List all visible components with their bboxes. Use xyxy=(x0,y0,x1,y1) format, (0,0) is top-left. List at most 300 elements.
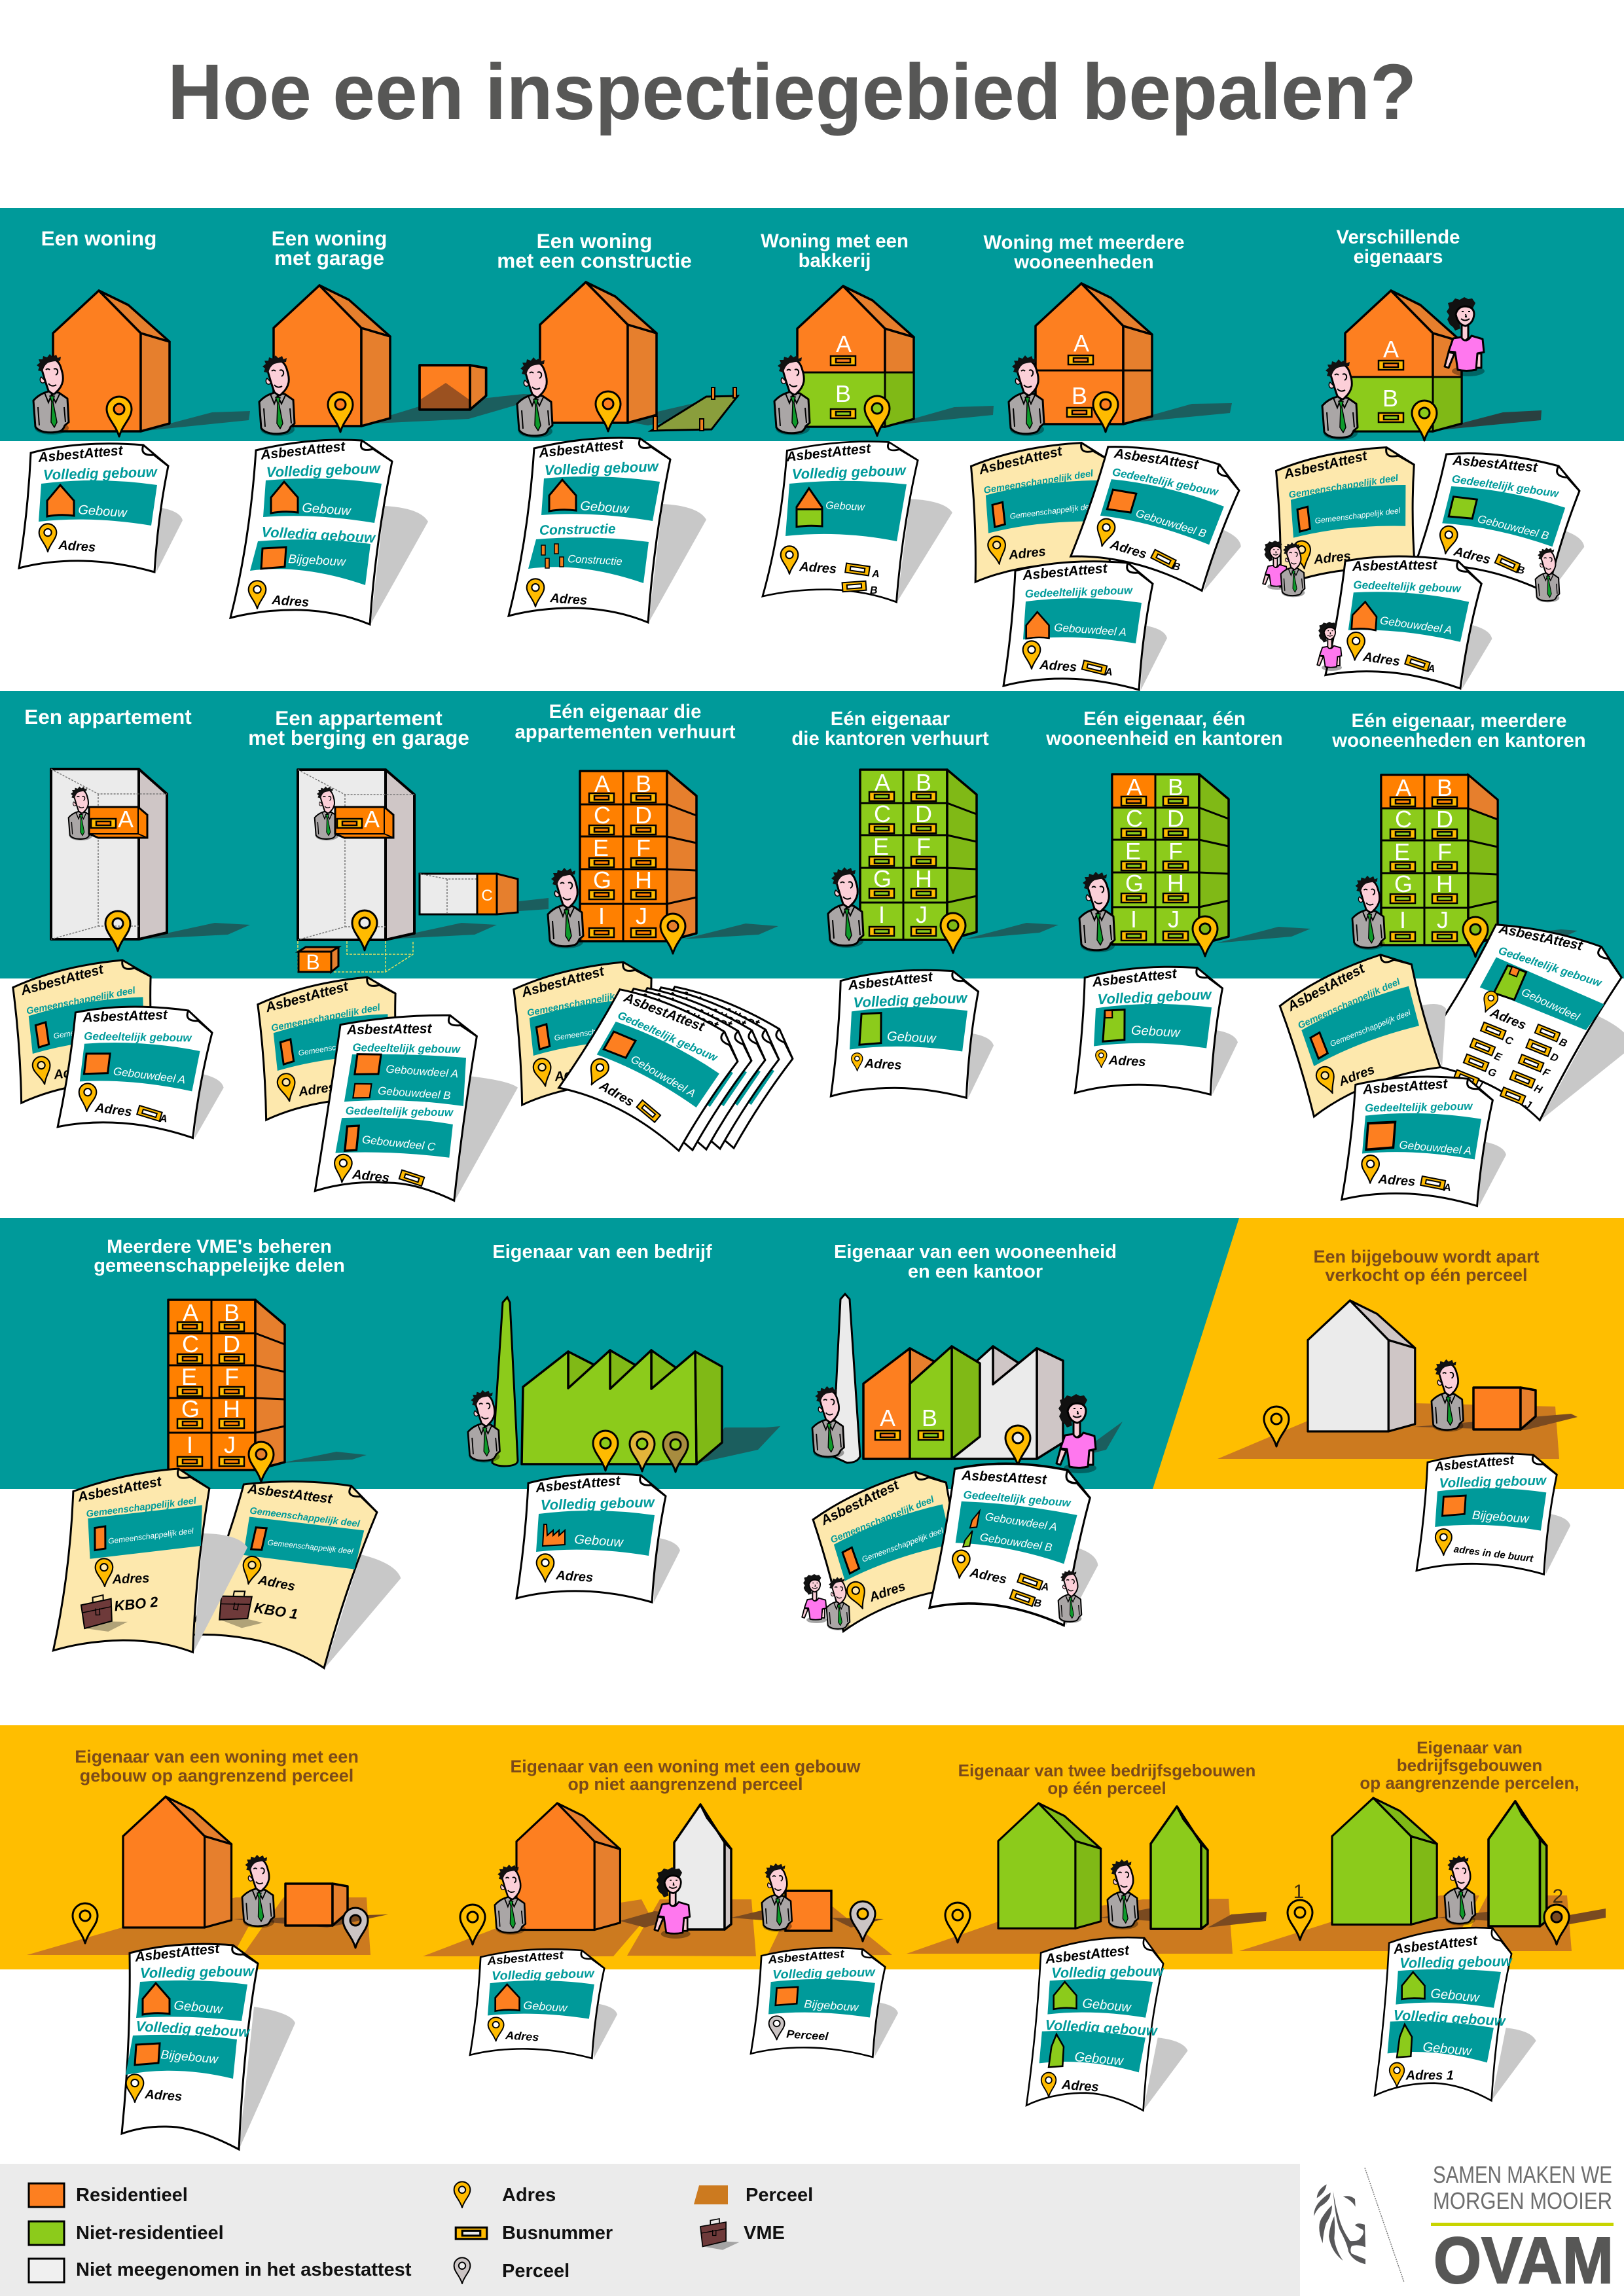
attest: part A: Adres xyxy=(1377,1172,1416,1189)
attest: part A: Gedeeltelijk gebouw xyxy=(84,1030,193,1045)
address pin xyxy=(107,397,132,437)
tower: B xyxy=(1168,774,1183,800)
heading: Een appartement xyxy=(24,705,192,728)
legend item: Residentieel: Residentieel xyxy=(76,2185,188,2206)
house two-tone xyxy=(1345,291,1462,431)
legend item: Perceel xyxy=(694,2185,813,2206)
panel: Woning met een bakkerij xyxy=(761,230,994,602)
garage C: C xyxy=(481,887,493,905)
attest: parts A and B: Gebouwdeel B xyxy=(979,1531,1053,1554)
attest xyxy=(1375,1928,1536,2101)
attest: Gebouw xyxy=(574,1532,624,1550)
heading: Eigenaar van twee bedrijfsgebouwen xyxy=(958,1762,1255,1780)
attest: KBO 1: KBO 1 xyxy=(253,1600,299,1623)
heading: Eén eigenaar die xyxy=(549,701,701,723)
man xyxy=(517,357,552,438)
heading: Woning met een xyxy=(761,230,909,252)
tower: H xyxy=(915,865,932,892)
attest: AsbestAttest xyxy=(534,1473,621,1496)
attest: Adres xyxy=(58,538,96,555)
attest: KBO 2: Gemeenschappelijk deel xyxy=(86,1496,198,1520)
attest: Bijgebouw: Bijgebouw xyxy=(804,1998,859,2014)
attest: part A: Gebouwdeel A xyxy=(1379,614,1453,637)
attest: part A: A xyxy=(159,1113,168,1124)
building shadow xyxy=(629,397,740,425)
tower xyxy=(1381,774,1498,945)
attest: common part: Adres xyxy=(297,1080,336,1100)
shadow xyxy=(1414,1414,1578,1430)
attest xyxy=(19,443,183,572)
house xyxy=(123,1797,232,1928)
attest: part B: AsbestAttest xyxy=(1452,453,1539,475)
panel: Een appartement met berging en garage xyxy=(244,706,549,1204)
attest: Gebouw xyxy=(1130,1023,1182,1040)
attest: AsbestAttest xyxy=(537,437,624,461)
address pin xyxy=(352,910,377,950)
units A and B: A xyxy=(1074,330,1089,357)
attest: Bijgebouw: Volledig gebouw xyxy=(772,1966,876,1982)
man xyxy=(468,1390,500,1463)
panel: Eigenaar van een woning met een gebouw op niet aangrenzend perceel xyxy=(423,1757,898,2058)
man xyxy=(1445,1856,1475,1926)
attest: common part: Adres xyxy=(1336,1062,1377,1089)
tower: E xyxy=(1394,838,1410,865)
panel: Woning met meerdere wooneenheden xyxy=(958,232,1258,690)
pin 2: 2 xyxy=(1553,1886,1563,1907)
panel: Eigenaar van een wooneenheid en een kantoor xyxy=(799,1242,1123,1635)
units A and B: B xyxy=(1072,382,1087,409)
attest: Volledig gebouw xyxy=(43,463,158,483)
attest: Bijgebouw xyxy=(751,1946,898,2057)
legend item: Busnummer: Busnummer xyxy=(502,2223,613,2244)
man xyxy=(33,354,69,435)
building shadow xyxy=(890,406,994,425)
attest: common part: Gemeenschappelijk deel xyxy=(26,985,137,1017)
attest: A xyxy=(871,569,880,580)
attest: part B xyxy=(1414,442,1598,598)
chimney xyxy=(492,1297,518,1466)
panel: Eén eigenaar die appartementen verhuurt xyxy=(500,701,803,1157)
legend item: Niet-residentieel: Niet-residentieel xyxy=(76,2223,224,2244)
attest: list of units: Adres xyxy=(1488,1005,1528,1033)
woman xyxy=(655,1867,691,1939)
building shadow xyxy=(964,923,1058,939)
plot pin xyxy=(850,1901,875,1941)
man xyxy=(774,355,810,435)
building shadow xyxy=(1433,410,1542,431)
attest: part A: Gedeeltelijk gebouw xyxy=(1024,584,1134,600)
attest: AsbestAttest xyxy=(37,443,124,465)
man xyxy=(315,787,338,840)
attest: KBO 1 xyxy=(187,1461,416,1679)
annex xyxy=(1473,1388,1536,1429)
garage C xyxy=(420,874,518,914)
house xyxy=(1036,283,1152,424)
attest: common part: Adres xyxy=(1007,545,1047,563)
plot xyxy=(907,1899,1233,1954)
attest: common part: Gemeenschappelijk deel xyxy=(53,1018,139,1041)
heading: met berging en garage xyxy=(248,726,469,749)
heading: Een woning xyxy=(537,229,652,253)
attest: common part xyxy=(1265,937,1466,1121)
tower: I xyxy=(1130,906,1137,933)
tower: J xyxy=(1168,906,1180,933)
attest: list of units xyxy=(1411,897,1624,1142)
attest fan: back sheets: AsbestAttest xyxy=(649,988,734,1033)
owner right xyxy=(1536,548,1559,602)
attest: parts A and B xyxy=(929,1456,1107,1628)
storage B xyxy=(298,947,338,974)
attest: common part: Gemeenschappelijk deel xyxy=(526,987,638,1019)
tower: G xyxy=(593,867,611,893)
tower: A xyxy=(1127,774,1142,800)
panel: Een bijgebouw wordt apart verkocht op één perceel xyxy=(1218,1247,1578,1574)
attest: Gebouw xyxy=(887,1029,937,1046)
attest: part A: AsbestAttest xyxy=(1352,558,1438,574)
attest: common part: Adres xyxy=(553,1065,592,1085)
attest: Gebouw: AsbestAttest xyxy=(486,1948,564,1967)
attest: common part: Adres xyxy=(52,1063,92,1083)
attest: parts A B C xyxy=(315,1007,522,1204)
units A and B: A xyxy=(880,1405,895,1431)
attest: part A: A xyxy=(1104,667,1113,678)
tower: J xyxy=(636,903,647,929)
attest fan: front sheet: AsbestAttest xyxy=(621,990,707,1035)
tower: C xyxy=(874,800,891,827)
attest: Volledig gebouw xyxy=(1399,1953,1513,1971)
attest: AsbestAttest xyxy=(134,1941,221,1965)
legend background xyxy=(0,2164,1300,2296)
attest: common part: Adres xyxy=(1312,549,1352,567)
tower: E xyxy=(181,1363,197,1390)
attest: list of units: F xyxy=(1541,1067,1552,1080)
attest: part A: Adres xyxy=(1362,649,1401,669)
annex xyxy=(785,1891,831,1931)
attest: parts A B C: Gebouwdeel C xyxy=(361,1133,437,1153)
man xyxy=(812,1386,844,1459)
attest: part B: Adres xyxy=(1452,544,1492,567)
address pin xyxy=(105,911,130,951)
attest xyxy=(509,437,706,622)
attest: list of units: D xyxy=(1549,1051,1560,1065)
attest xyxy=(516,1473,680,1602)
attest: Volledig gebouw xyxy=(1393,2007,1507,2029)
attest: Adres xyxy=(1060,2077,1099,2095)
band: row 2 teal xyxy=(0,691,1624,978)
attest: common part: AsbestAttest xyxy=(977,444,1064,478)
panel: Een appartement xyxy=(0,705,250,1139)
attest: part B: B xyxy=(1516,564,1525,577)
logo wordmark: OVAM xyxy=(1434,2224,1614,2296)
attest: part B xyxy=(1070,435,1258,597)
attest: common part: Gemeenschappelijk deel xyxy=(554,1020,640,1043)
attest: Adres xyxy=(144,2087,183,2104)
tower: C xyxy=(1395,806,1412,833)
tower xyxy=(860,769,977,940)
address pin xyxy=(1463,917,1488,957)
attest: common part: Gemeenschappelijk deel xyxy=(1288,473,1399,501)
attest: part A xyxy=(1325,550,1498,691)
woman xyxy=(1445,297,1485,376)
attest xyxy=(122,1941,295,2149)
attest: parts A B C: Gebouwdeel B xyxy=(378,1085,451,1102)
attest: common part: Gemeenschappelijk deel xyxy=(298,1035,384,1058)
house xyxy=(516,1803,620,1929)
attest: list of units: J xyxy=(1523,1099,1533,1111)
attest fan: back sheets: AsbestAttest xyxy=(635,989,721,1034)
heading: Een woning xyxy=(41,226,156,250)
attest: part B: AsbestAttest xyxy=(1113,446,1200,473)
tower: G xyxy=(181,1395,200,1422)
attest xyxy=(230,439,428,624)
house xyxy=(274,285,390,426)
attest: Constructie xyxy=(539,522,616,538)
pin 1: 1 xyxy=(1293,1881,1304,1903)
attest: list of units: Gebouwdeel xyxy=(1519,986,1582,1024)
attest: part A xyxy=(1003,561,1167,690)
attest fan: front sheet: Adres xyxy=(596,1078,636,1109)
address pins xyxy=(593,1431,688,1472)
heading: Eén eigenaar, meerdere xyxy=(1352,710,1566,732)
tower: D xyxy=(915,800,932,827)
attest: list of units: G xyxy=(1486,1066,1498,1080)
unit A xyxy=(335,806,393,838)
heading: op aangrenzende percelen, xyxy=(1360,1773,1579,1793)
attest: AsbestAttest xyxy=(1091,966,1178,990)
address pin xyxy=(1193,916,1218,956)
man xyxy=(1079,872,1115,952)
attest: parts A and B: Adres xyxy=(968,1566,1008,1587)
heading: bedrijfsgebouwen xyxy=(1397,1755,1542,1775)
heading: Eigenaar van een bedrijf xyxy=(492,1242,712,1263)
heading: Eén eigenaar, één xyxy=(1083,708,1246,730)
legend xyxy=(0,2164,1300,2296)
attest: Volledig gebouw xyxy=(1045,2017,1159,2039)
tower: I xyxy=(187,1431,193,1458)
house two-tone xyxy=(797,286,914,427)
house xyxy=(540,282,657,423)
attest fan: back sheets xyxy=(571,973,803,1156)
building shadow xyxy=(362,394,550,424)
attest: part B: Gebouwdeel B xyxy=(1134,507,1208,540)
woman xyxy=(1056,1394,1096,1473)
tower xyxy=(1112,774,1229,944)
units A and B xyxy=(875,1405,943,1440)
tower: B xyxy=(916,769,931,796)
heading: die kantoren verhuurt xyxy=(791,728,989,749)
tower: B xyxy=(1437,774,1453,801)
attest: Adres xyxy=(549,591,588,608)
units A and B: B xyxy=(1382,385,1398,412)
heading: appartementen verhuurt xyxy=(514,721,736,743)
units A and B: A xyxy=(836,331,852,357)
legend item: Perceel: Perceel xyxy=(746,2185,813,2206)
attest: parts A and B: B xyxy=(1034,1598,1042,1609)
attest: part A: A xyxy=(1426,663,1435,675)
attest: common part: Gemeenschappelijk deel xyxy=(1314,506,1401,526)
legend item: Adres: Adres xyxy=(502,2185,556,2206)
man xyxy=(69,787,92,840)
attest: Volledig gebouw xyxy=(853,990,969,1011)
heading: Een bijgebouw wordt apart xyxy=(1313,1247,1540,1266)
building shadow xyxy=(1080,1422,1123,1456)
attest: part A: Gedeeltelijk gebouw xyxy=(1353,579,1462,595)
attest: part A: A xyxy=(1443,1183,1451,1194)
address pin xyxy=(660,914,685,954)
tower: E xyxy=(873,833,889,860)
heading: verkocht op één perceel xyxy=(1325,1265,1528,1285)
attest: list of units: H xyxy=(1532,1083,1543,1096)
attest: Bijgebouw xyxy=(160,2048,219,2067)
panel: Meerdere VME's beheren gemeenschappelijke delen xyxy=(47,1236,416,1679)
attest: common part: AsbestAttest xyxy=(818,1477,902,1528)
attest: list of units: I xyxy=(1477,1081,1484,1092)
shadow xyxy=(233,1914,388,1928)
garage xyxy=(420,365,486,410)
legend item: Residentieel xyxy=(29,2183,188,2207)
attest: Gebouw: Adres xyxy=(505,2029,539,2043)
tower: B xyxy=(224,1299,240,1326)
attest: Volledig gebouw xyxy=(140,1963,255,1981)
heading: Eén eigenaar xyxy=(831,708,950,730)
attest: common part: Gemeenschappelijk deel xyxy=(1009,501,1096,521)
attest: Adres xyxy=(555,1568,594,1585)
attest: part A: AsbestAttest xyxy=(82,1007,168,1026)
attest: Volledig gebouw xyxy=(261,524,377,546)
tower: F xyxy=(916,833,931,860)
attest: Bijgebouw xyxy=(288,552,347,569)
attest: common part xyxy=(0,954,169,1107)
tower: H xyxy=(223,1395,240,1422)
address pin xyxy=(1005,1426,1030,1465)
man xyxy=(828,867,863,948)
units A and B xyxy=(1067,330,1093,417)
band: row 3 teal xyxy=(0,1218,1624,1489)
attest: AsbestAttest xyxy=(1434,1453,1515,1475)
factory xyxy=(522,1350,722,1464)
man xyxy=(1432,1359,1464,1432)
attest: part B: Adres xyxy=(1108,537,1148,562)
attest: parts A B C: Gedeeltelijk gebouw xyxy=(345,1105,454,1119)
attest: part A xyxy=(58,1002,228,1139)
title: Hoe een inspectiegebied bepalen? xyxy=(168,48,1416,136)
plots xyxy=(423,1899,892,1956)
tower: H xyxy=(1167,870,1184,897)
tower: A xyxy=(183,1299,198,1326)
attest: parts A B C: Gebouwdeel A xyxy=(386,1063,459,1080)
attest: common part: AsbestAttest xyxy=(519,963,606,1000)
heading: eigenaars xyxy=(1354,246,1443,268)
panel: Een woning met een constructie xyxy=(497,229,740,622)
tower: F xyxy=(225,1363,239,1390)
logo: Flemish lion xyxy=(1314,2184,1365,2264)
attest: Gebouw xyxy=(1082,1996,1132,2015)
address pin xyxy=(941,913,965,953)
attest: part B: Gebouwdeel B xyxy=(1476,512,1550,542)
attest: common part xyxy=(1263,442,1429,590)
attest: common part: Gemeenschappelijk deel xyxy=(983,469,1094,496)
attest: Adres xyxy=(799,560,837,577)
plot pin xyxy=(343,1908,368,1948)
address pin xyxy=(865,396,890,436)
building shadow xyxy=(386,898,549,939)
building shadow xyxy=(1122,403,1232,423)
attest: Volledig gebouw xyxy=(1097,986,1213,1007)
legend item: Perceel pin: Perceel xyxy=(502,2261,569,2282)
logo divider xyxy=(1365,2168,1404,2282)
legend item: Niet-residentieel xyxy=(29,2221,224,2245)
unit A: A xyxy=(118,806,134,833)
attest: parts A B C: Adres xyxy=(351,1167,390,1185)
attest: AsbestAttest xyxy=(259,439,346,463)
attest: KBO 1: AsbestAttest xyxy=(246,1481,334,1507)
heading: gebouw op aangrenzend perceel xyxy=(80,1766,353,1785)
tower: G xyxy=(1394,870,1413,897)
man xyxy=(259,355,295,436)
address pin xyxy=(1412,401,1437,440)
panel: Eigenaar van bedrijfsgebouwen op aangrenzende percelen xyxy=(1239,1738,1606,2101)
tower: D xyxy=(1436,806,1453,833)
heading: Meerdere VME's beheren xyxy=(107,1236,332,1257)
logo: OVAM xyxy=(1314,2161,1614,2296)
attest: Gebouw: Gebouw xyxy=(523,1999,568,2015)
tower: C xyxy=(1126,805,1143,832)
attest: list of units: Gedeeltelijk gebouw xyxy=(1497,944,1604,990)
attest xyxy=(763,440,952,602)
apartment block xyxy=(298,770,414,940)
heading: Eigenaar van een woning met een gebouw xyxy=(511,1757,860,1776)
attest: list of units: B xyxy=(1557,1037,1568,1050)
heading: wooneenheid en kantoren xyxy=(1045,728,1283,749)
panel: Eigenaar van twee bedrijfsgebouwen op één perceel xyxy=(907,1762,1267,2111)
attest: common part: AsbestAttest xyxy=(1282,448,1369,482)
heading: Verschillende xyxy=(1337,226,1460,248)
heading: Eigenaar van een wooneenheid xyxy=(834,1242,1117,1263)
tower: J xyxy=(916,901,928,928)
building shadow xyxy=(140,411,250,431)
heading: gemeenschappeleijke delen xyxy=(94,1255,345,1276)
tower: C xyxy=(594,802,611,829)
units A and B: A xyxy=(1383,336,1399,363)
attest: common part: Adres xyxy=(867,1579,907,1605)
attest xyxy=(1416,1453,1570,1574)
attest: common part: AsbestAttest xyxy=(18,961,105,998)
tower: F xyxy=(1168,838,1183,865)
attest xyxy=(1026,1937,1188,2111)
attest: part A: Gebouwdeel A xyxy=(113,1065,186,1086)
address pin xyxy=(1264,1407,1289,1446)
plots xyxy=(1239,1895,1572,1951)
units A and B xyxy=(831,331,856,418)
attest: AsbestAttest xyxy=(1044,1943,1130,1967)
legend item: Niet meegenomen: Niet meegenomen in het asbestattest xyxy=(76,2259,412,2280)
attest: part B: Gedeeltelijk gebouw xyxy=(1111,465,1220,499)
attest xyxy=(1073,965,1238,1097)
tower: F xyxy=(636,834,651,861)
heading: op niet aangrenzend perceel xyxy=(568,1774,803,1794)
building shadow xyxy=(699,1426,780,1463)
panel: Eén eigenaar die kantoren verhuurt xyxy=(791,708,1058,1100)
building shadow xyxy=(139,923,250,939)
units A and B: B xyxy=(922,1405,937,1431)
unit A: A xyxy=(364,806,380,833)
man xyxy=(242,1855,274,1928)
heading: Eigenaar van xyxy=(1416,1738,1523,1757)
panel: Eén eigenaar, één wooneenheid en kantoren xyxy=(1045,708,1310,1097)
legend item: Adres xyxy=(454,2181,556,2208)
tower: I xyxy=(1399,906,1406,933)
pin 1 xyxy=(1288,1881,1312,1940)
